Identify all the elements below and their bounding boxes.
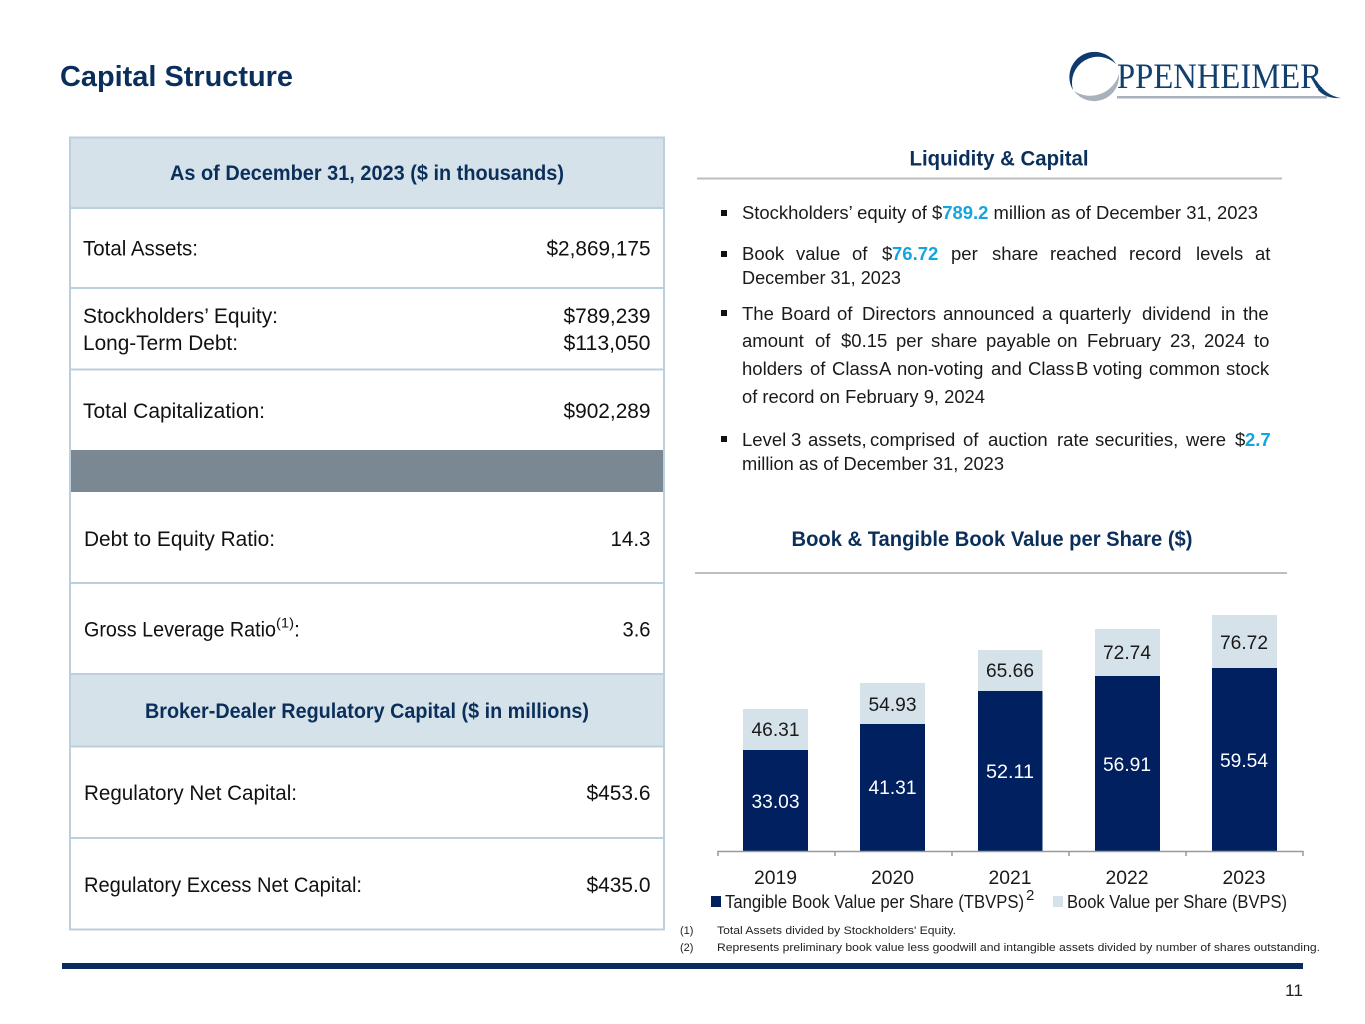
row: regulatory excess: $435.0 [586,873,651,897]
row: equity and debt: $113,050 [564,331,651,355]
bullet 4: of [963,429,979,450]
bullet 3: Class [1028,358,1074,379]
footnotes [680,925,1320,954]
legend: Tangible Book Value per Share (TBVPS) [725,892,1024,912]
axis labels: 2021 [988,868,1032,889]
bar 2019: 33.03 [752,792,800,813]
legend: 2 [1026,887,1034,904]
bullet 3: and [991,358,1022,379]
bullet 2: at [1255,243,1270,264]
legend: Book Value per Share (BVPS) [1067,892,1287,912]
bullet 3: amount [742,330,804,351]
axis labels: 2020 [871,868,914,889]
logo: Oppenheimer [1069,52,1341,101]
bullet 2: value [796,243,840,264]
bar 2023: 76.72 [1220,633,1268,654]
panel: capital table [70,138,664,930]
page number: 11 [1285,982,1303,1000]
section header: broker-dealer: Broker-Dealer Regulatory Capital ($ in millions) [145,700,589,723]
table header [71,138,663,208]
bullet 4: securities, [1095,429,1178,450]
row: equity and debt: Long-Term Debt: [83,331,238,355]
row: gross leverage: Gross Leverage Ratio [84,618,276,642]
bullet 2 [721,243,1270,288]
bullet 2: Book [742,243,785,264]
bullet 3: of [837,303,853,324]
row: total assets: Total Assets: [83,236,198,260]
bullet 3: a [1042,303,1053,324]
bullet 3: Board [781,303,830,324]
bar 2021: 52.11 [986,762,1034,783]
bullet 3: of [810,358,826,379]
row: regulatory net capital: $453.6 [586,781,651,805]
bar chart: book value per share [711,615,1303,912]
row: gross leverage: : [294,618,300,642]
bullet 3: to [1254,330,1269,351]
row: equity and debt [83,304,651,355]
text block: liquidity bullets [721,202,1271,474]
bullet 2: share [992,243,1038,264]
bullet 3: A [879,358,892,379]
bullet 3: non-voting [897,358,983,379]
footnotes: Total Assets divided by Stockholders' Equity. [717,925,956,937]
row: equity and debt: Stockholders’ Equity: [83,304,278,328]
bullet 3: of record on February 9, 2024 [742,386,985,407]
row: gross leverage: 3.6 [622,618,651,642]
bar 2019 [743,709,808,851]
table header: As of December 31, 2023 ($ in thousands) [170,162,564,185]
row: total assets [83,236,651,260]
footer rule [62,963,1303,969]
bullet 3: quarterly [1059,303,1132,324]
bullet 3: The [742,303,774,324]
bullet 3: stock [1226,358,1270,379]
bullet 4: Level [742,429,786,450]
bullet 3: the [1243,303,1269,324]
bullet 3: 2024 [1204,330,1245,351]
row: debt to equity: Debt to Equity Ratio: [84,527,275,551]
bullet 4: auction [988,429,1048,450]
footnotes: (2) [680,942,693,954]
bar 2022 [1095,629,1160,851]
bar 2021 [978,650,1042,851]
bullet 3: common [1149,358,1220,379]
row: regulatory excess: Regulatory Excess Net Capital: [84,873,362,897]
bullet 3: payable [986,330,1051,351]
axis labels: 2022 [1106,868,1148,889]
legend [711,887,1287,912]
row: regulatory net capital: Regulatory Net Capital: [84,781,297,805]
bullet 3: in [1221,303,1235,324]
row: total capitalization [83,399,650,423]
bullet 2: December 31, 2023 [742,267,901,288]
bullet 4: 2.7 [1245,429,1271,450]
title: Capital Structure [60,61,293,93]
bullet 3: 23, [1170,330,1196,351]
row: total assets: $2,869,175 [546,236,651,260]
axis labels [754,868,1266,889]
bar 2021: 65.66 [986,661,1034,682]
bullet 2: of [852,243,868,264]
bullet 3: per [896,330,923,351]
section header: broker-dealer [71,674,663,746]
bullet 2: 76.72 [892,243,938,264]
bullet 2: levels [1196,243,1243,264]
bullet 3: dividend [1142,303,1211,324]
bullet 3: on [1057,330,1078,351]
axis labels: 2023 [1222,868,1266,889]
heading: liquidity and capital: Liquidity & Capital [910,148,1088,170]
row: debt to equity [84,527,651,551]
bullet 3: of [815,330,831,351]
bullet 3: holders [742,358,803,379]
bullet 3: share [931,330,977,351]
bullet 3: voting [1093,358,1142,379]
bullet 4: comprised [870,429,955,450]
bullet 2: $ [882,243,892,264]
bar 2020: 41.31 [868,778,916,799]
row: total capitalization: Total Capitalization: [83,399,265,423]
row: regulatory excess [84,873,651,897]
heading: book value chart: Book & Tangible Book Value per Share ($) [792,528,1192,551]
bullet 3: announced [943,303,1035,324]
bullet 4: rate [1057,429,1089,450]
bullet 1: Stockholders’ equity of $789.2 million as of December 31, 2023 [742,202,1258,223]
bullet 2: per [951,243,978,264]
row: debt to equity: 14.3 [610,527,651,551]
grey band [71,450,663,492]
bullet 3 [721,303,1270,407]
footnotes: (1) [680,925,693,937]
bar 2023: 59.54 [1220,751,1268,772]
row: equity and debt: $789,239 [564,304,650,328]
row: gross leverage: (1) [276,616,294,630]
bullet 3: $0.15 [841,330,887,351]
row: total capitalization: $902,289 [564,399,650,423]
bullet 4: million as of December 31, 2023 [742,453,1004,474]
axis labels: 2019 [754,868,797,889]
bar 2019: 46.31 [752,720,800,741]
footnotes: Represents preliminary book value less goodwill and intangible assets divided by number of shares outstanding. [717,942,1320,954]
bullet 4: $ [1235,429,1245,450]
bullet 3: Directors [862,303,936,324]
bullet 3: February [1087,330,1162,351]
bullet 3: Class [832,358,878,379]
bar 2022: 72.74 [1103,643,1151,664]
bullet 4: were [1185,429,1226,450]
bullet 4 [721,429,1271,474]
bar 2022: 56.91 [1103,755,1151,776]
bullet 4: 3 [791,429,801,450]
row: regulatory net capital [84,781,651,805]
bar 2020: 54.93 [868,695,916,716]
bullet 2: reached [1050,243,1117,264]
bullet 3: B [1076,358,1088,379]
bullet 2: record [1129,243,1181,264]
bullet 4: assets, [808,429,867,450]
row: gross leverage [84,616,651,642]
bar 2020 [860,683,925,851]
bar 2023 [1212,615,1277,851]
logo: Oppenheimer: PPENHEIMER [1117,56,1322,96]
